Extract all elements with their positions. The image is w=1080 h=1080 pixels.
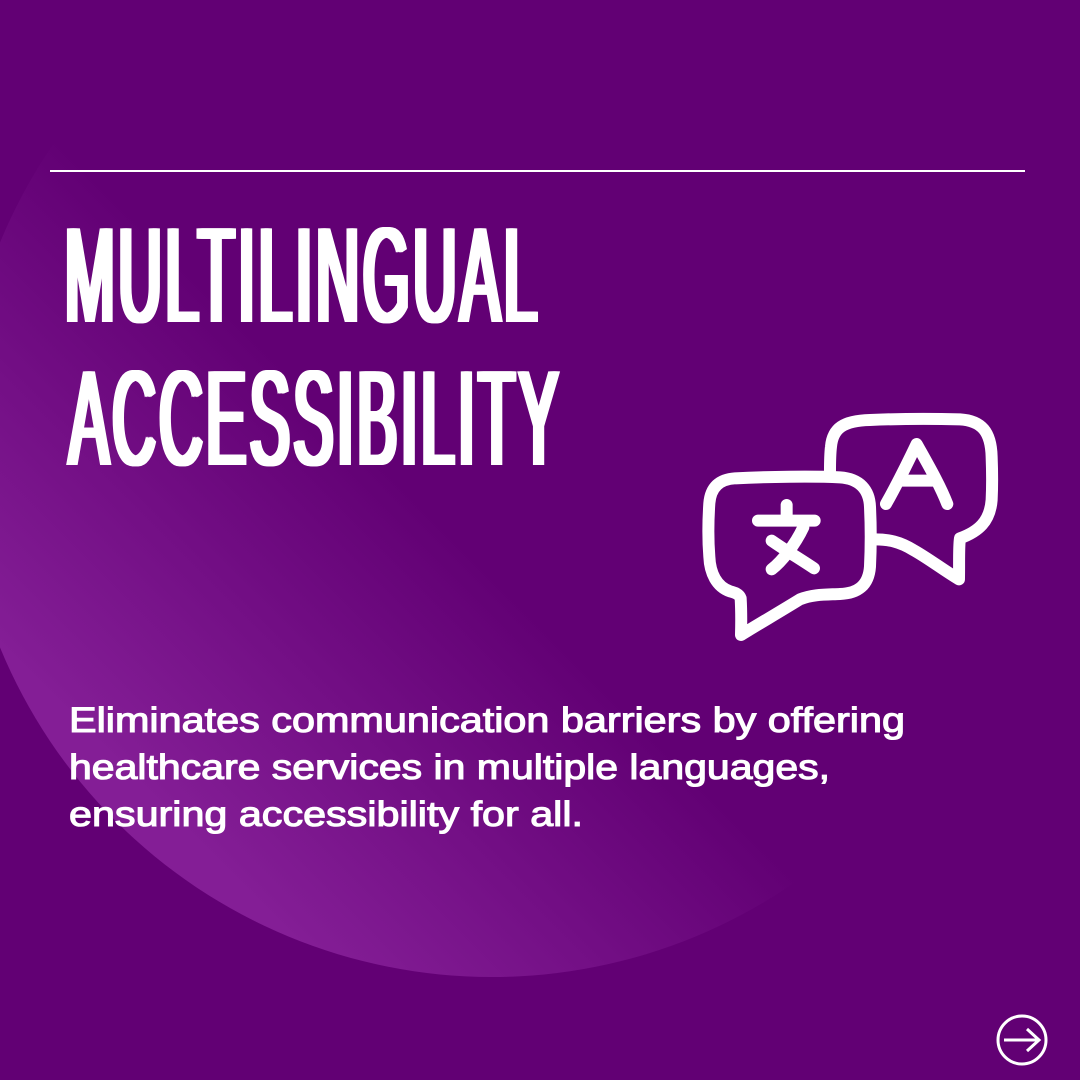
title bbox=[62, 199, 560, 494]
icon: right bubble bbox=[830, 419, 992, 579]
title line 2: ACCESSIBILITY bbox=[66, 342, 559, 494]
icon: left bubble bbox=[708, 477, 871, 635]
body text: ensuring accessibility for all. bbox=[69, 795, 583, 834]
body text: healthcare services in multiple languages, bbox=[69, 748, 830, 787]
icon: letter A bbox=[886, 444, 947, 504]
title line 1: MULTILINGUAL bbox=[62, 199, 538, 351]
top divider line bbox=[50, 170, 1025, 172]
body text: Eliminates communication barriers by offering bbox=[69, 701, 905, 740]
icon: character wen bbox=[758, 505, 815, 569]
